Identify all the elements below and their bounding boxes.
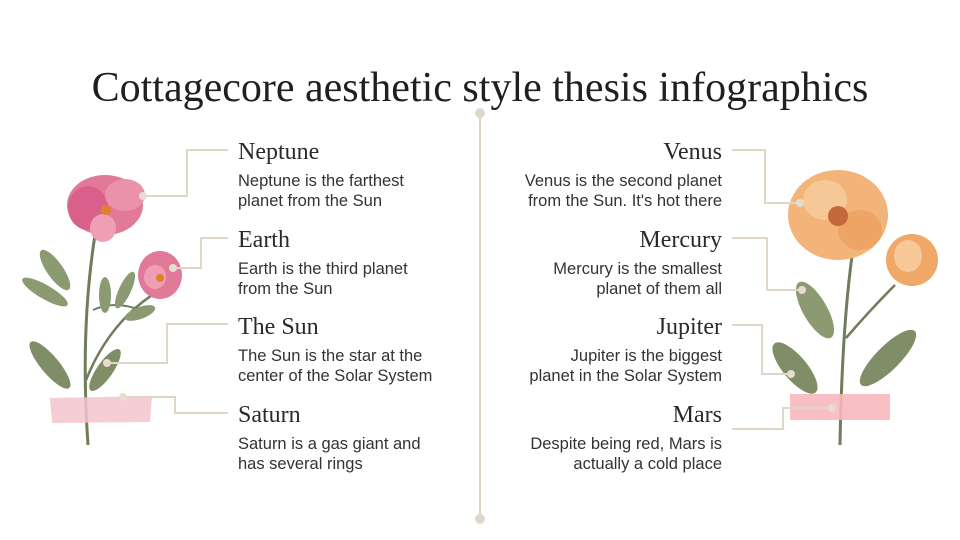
item: Mercury: Mercury is the smallest [553, 260, 722, 278]
right flower [765, 170, 938, 445]
item: Earth: Earth is the third planet [238, 260, 408, 278]
item: Mars: Mars [673, 402, 722, 428]
item: Saturn [238, 402, 421, 472]
item: Saturn: Saturn is a gas giant and [238, 435, 421, 453]
item: Venus: from the Sun. It's hot there [528, 192, 722, 210]
item: Mercury: Mercury [639, 227, 722, 253]
item: The Sun: center of the Solar System [238, 366, 432, 384]
item: Neptune: Neptune is the farthest [238, 172, 404, 190]
item: Jupiter: planet in the Solar System [529, 366, 722, 384]
item: The Sun: The Sun is the star at the [238, 347, 422, 365]
item: Jupiter: Jupiter is the biggest [571, 347, 722, 365]
item: Mars: Despite being red, Mars is [530, 435, 722, 453]
item: Earth: Earth [238, 227, 290, 253]
item: Saturn: has several rings [238, 454, 363, 472]
item: Jupiter: Jupiter [657, 314, 722, 340]
item: The Sun [238, 314, 432, 384]
item: Venus [524, 139, 722, 210]
item: Neptune [238, 139, 404, 210]
item: Neptune: planet from the Sun [238, 192, 382, 210]
item: Jupiter [529, 314, 722, 384]
item: Saturn: Saturn [238, 402, 301, 428]
title: Cottagecore aesthetic style thesis infographics [92, 65, 868, 111]
left flower [19, 175, 182, 445]
item: Mars [530, 402, 722, 472]
item: Mercury [553, 227, 722, 298]
item: Earth: from the Sun [238, 280, 332, 298]
item: Earth [238, 227, 408, 298]
item: The Sun: The Sun [238, 314, 319, 340]
item: Neptune: Neptune [238, 139, 319, 165]
item: Venus: Venus [663, 139, 722, 165]
item: Mercury: planet of them all [596, 280, 722, 298]
item: Venus: Venus is the second planet [525, 172, 722, 190]
center divider [476, 109, 484, 523]
connector lines [107, 150, 832, 429]
item: Mars: actually a cold place [573, 454, 722, 472]
